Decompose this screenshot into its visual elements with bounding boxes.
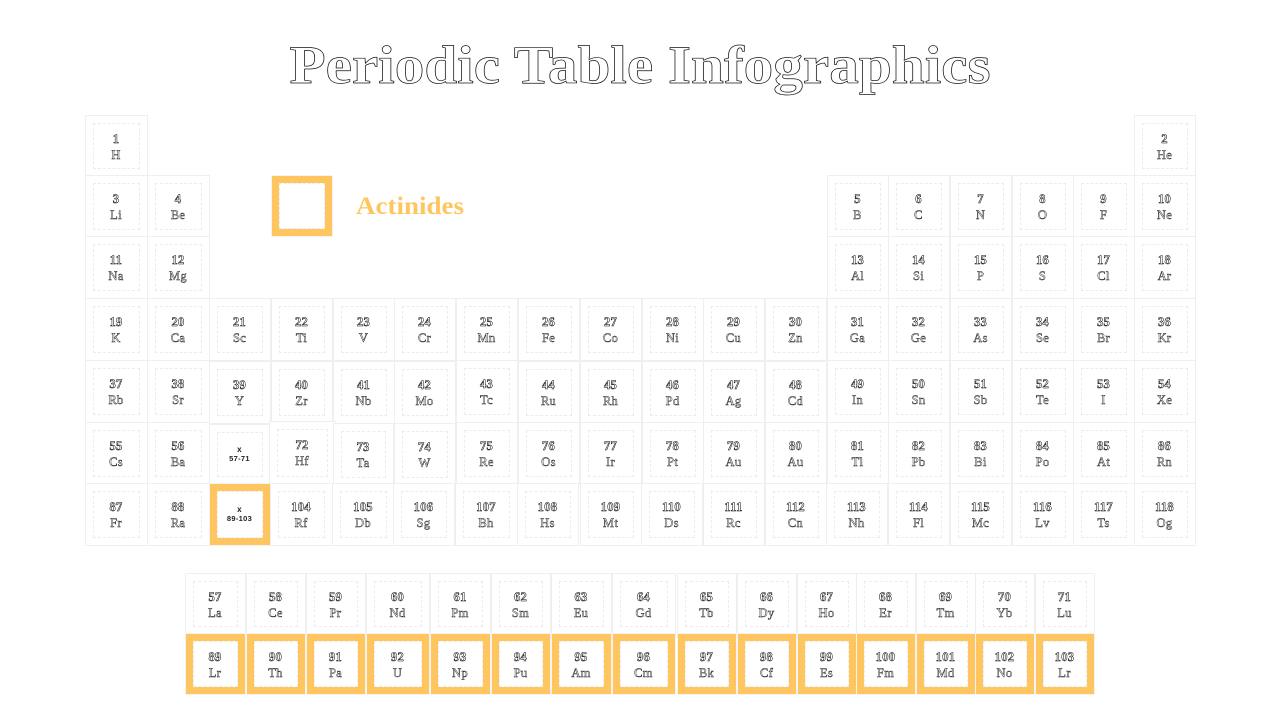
panel: lanthanides row: Tm bbox=[937, 606, 954, 620]
row 6 elements: Au bbox=[726, 455, 741, 469]
row 2 elements: 6 bbox=[915, 192, 922, 206]
panel: actinides row: U bbox=[393, 666, 402, 680]
title: Periodic Table Infographics bbox=[289, 35, 991, 95]
panel: lanthanides row: 65 bbox=[700, 590, 713, 604]
row 6 elements: Ir bbox=[606, 455, 615, 469]
row 6 elements: Os bbox=[541, 455, 556, 469]
row 2 elements: F bbox=[1100, 208, 1107, 222]
row 3 elements: 15 bbox=[974, 253, 987, 267]
row 6 elements: At bbox=[1097, 455, 1110, 469]
row 6 elements: Tl bbox=[852, 455, 863, 469]
row 4 elements: Ge bbox=[911, 331, 926, 345]
row 5 elements: 51 bbox=[974, 377, 987, 391]
row 6 elements: 80 bbox=[789, 439, 802, 453]
row 4 elements: 32 bbox=[912, 315, 925, 329]
panel: actinides row: No bbox=[997, 666, 1012, 680]
row 5 elements: 50 bbox=[912, 377, 925, 391]
row 6 elements: 81 bbox=[851, 439, 864, 453]
row 5 elements: 47 bbox=[727, 378, 740, 392]
row 7 elements: Fr bbox=[110, 516, 122, 530]
row 6 elements: 56 bbox=[171, 439, 185, 453]
panel: actinides row: 94 bbox=[514, 650, 527, 664]
row 7 elements: 88 bbox=[171, 500, 185, 514]
row 7 elements: Rf bbox=[294, 516, 308, 530]
row 7 elements: Og bbox=[1157, 516, 1172, 530]
panel: actinides row: Es bbox=[820, 666, 833, 680]
row 2 elements: B bbox=[853, 208, 862, 222]
row 7 elements: 112 bbox=[786, 500, 805, 514]
row 2 elements: 7 bbox=[977, 192, 984, 206]
row 5 elements: Sr bbox=[172, 393, 184, 407]
row 4 elements: 19 bbox=[109, 315, 123, 329]
row 4 elements: Ga bbox=[850, 331, 865, 345]
row 7 elements: Ds bbox=[664, 516, 679, 530]
row 6 elements: 78 bbox=[666, 439, 679, 453]
row 4 elements: 30 bbox=[789, 315, 802, 329]
row 6 elements: 84 bbox=[1036, 439, 1049, 453]
row 5 elements: Y bbox=[235, 394, 244, 408]
row 5 elements: 52 bbox=[1036, 377, 1049, 391]
row 4 elements: 27 bbox=[604, 315, 617, 329]
panel: lanthanides row: Pm bbox=[451, 606, 469, 620]
panel: lanthanides row: 63 bbox=[574, 590, 588, 604]
panel: lanthanides row: Dy bbox=[759, 606, 774, 620]
row 6 elements: Hf bbox=[295, 454, 309, 468]
panel: actinides row: Pu bbox=[514, 666, 527, 680]
row 4 elements: 35 bbox=[1097, 315, 1110, 329]
panel: actinides row: 92 bbox=[391, 650, 404, 664]
row 6 elements: Cs bbox=[109, 455, 123, 469]
row 7 elements: Ra bbox=[171, 516, 185, 530]
panel: main periodic table bbox=[85, 115, 1196, 546]
row 3 elements: 17 bbox=[1097, 253, 1110, 267]
row 7 elements: x bbox=[237, 505, 242, 514]
row 7 elements: 107 bbox=[476, 500, 496, 514]
row 4 elements: Zn bbox=[788, 331, 803, 345]
row 2 elements: Be bbox=[171, 208, 185, 222]
row 4 elements: Ni bbox=[666, 331, 679, 345]
panel: lanthanides row: Lu bbox=[1057, 606, 1072, 620]
row 2 elements: C bbox=[914, 208, 923, 222]
panel: actinides row: Th bbox=[268, 666, 283, 680]
row 5 elements: 38 bbox=[171, 377, 185, 391]
panel: lanthanides row: Gd bbox=[636, 606, 651, 620]
row 4 elements: 31 bbox=[851, 315, 864, 329]
row 2 elements: Ne bbox=[1157, 208, 1172, 222]
row 3 elements: S bbox=[1039, 269, 1046, 283]
row 7 elements: 111 bbox=[724, 500, 743, 514]
row 6 elements: W bbox=[418, 456, 431, 470]
row 4 elements: Br bbox=[1097, 331, 1110, 345]
row 4 elements: 29 bbox=[727, 315, 740, 329]
row 3 elements: Na bbox=[108, 269, 124, 283]
row 5 elements: I bbox=[1101, 393, 1106, 407]
panel: lanthanides row: Sm bbox=[512, 606, 529, 620]
row 1 elements: He bbox=[1157, 148, 1172, 162]
row 5 elements: 43 bbox=[480, 377, 493, 391]
row 3 elements: Si bbox=[913, 269, 924, 283]
panel: lanthanides row: 64 bbox=[637, 590, 650, 604]
row 6 elements: 73 bbox=[356, 440, 370, 454]
panel: actinides row: 89 bbox=[208, 650, 222, 664]
panel: actinides row: 90 bbox=[269, 650, 282, 664]
row 6 elements: 74 bbox=[418, 440, 431, 454]
row 7 elements: 104 bbox=[291, 500, 311, 514]
row 2 elements: 9 bbox=[1100, 192, 1107, 206]
row 5 elements: 41 bbox=[357, 378, 370, 392]
row 6 elements: 83 bbox=[974, 439, 987, 453]
panel: lanthanides row: 66 bbox=[760, 590, 773, 604]
row 6 elements: 86 bbox=[1158, 439, 1171, 453]
row 4 elements: Cu bbox=[726, 331, 741, 345]
panel: actinides row: Lr bbox=[209, 666, 221, 680]
row 3 elements: Al bbox=[851, 269, 864, 283]
panel: actinides row: Bk bbox=[699, 666, 714, 680]
row 7 elements: 113 bbox=[847, 500, 866, 514]
row 7 elements: Mt bbox=[603, 516, 618, 530]
panel: lanthanides row bbox=[185, 573, 1095, 633]
row 3 elements: 18 bbox=[1158, 253, 1171, 267]
row 7 elements: 116 bbox=[1033, 500, 1052, 514]
panel: lanthanides row: Pr bbox=[330, 606, 341, 620]
row 3 elements: 16 bbox=[1036, 253, 1049, 267]
row 2 elements: 5 bbox=[854, 192, 861, 206]
row 7 elements: Db bbox=[355, 516, 371, 530]
row 7 elements: Lv bbox=[1035, 516, 1050, 530]
row 5 elements: In bbox=[852, 393, 863, 407]
panel: actinides row: 96 bbox=[637, 650, 650, 664]
row 5 elements: 48 bbox=[789, 378, 802, 392]
row 2 elements bbox=[85, 175, 1196, 236]
row 2 elements: 4 bbox=[175, 192, 181, 206]
row 7 elements: Sg bbox=[417, 516, 430, 530]
row 5 elements: Pd bbox=[666, 394, 679, 408]
row 6 elements: x bbox=[237, 445, 242, 454]
panel: actinides row: 103 bbox=[1055, 650, 1074, 664]
row 3 elements: 13 bbox=[851, 253, 864, 267]
row 4 elements: Co bbox=[603, 331, 618, 345]
row 3 elements: Cl bbox=[1097, 269, 1110, 283]
row 2 elements: 3 bbox=[113, 192, 119, 206]
row 5 elements: Ru bbox=[541, 394, 556, 408]
row 7 elements: 105 bbox=[353, 500, 373, 514]
row 7 elements: Bh bbox=[478, 516, 494, 530]
row 6 elements: 75 bbox=[480, 439, 493, 453]
panel: lanthanides row: 68 bbox=[879, 590, 892, 604]
row 5 elements: 46 bbox=[666, 378, 679, 392]
row 5 elements: 39 bbox=[233, 378, 246, 392]
row 5 elements: 53 bbox=[1097, 377, 1110, 391]
panel: lanthanides row: 58 bbox=[269, 590, 282, 604]
row 4 elements: As bbox=[973, 331, 988, 345]
row 5 elements: Cd bbox=[788, 394, 803, 408]
row 5 elements: 54 bbox=[1158, 377, 1171, 391]
row 5 elements: 37 bbox=[109, 377, 123, 391]
panel: lanthanides row: Nd bbox=[390, 606, 405, 620]
panel: lanthanides row: Er bbox=[879, 606, 892, 620]
row 5 elements: Sn bbox=[912, 393, 925, 407]
row 6 elements: 85 bbox=[1097, 439, 1110, 453]
row 4 elements: 36 bbox=[1158, 315, 1171, 329]
row 7 elements: 109 bbox=[601, 500, 620, 514]
row 4 elements: 24 bbox=[418, 315, 431, 329]
panel: actinides row: 101 bbox=[936, 650, 955, 664]
panel: actinides row: 98 bbox=[760, 650, 773, 664]
row 5 elements: 40 bbox=[295, 378, 308, 392]
panel: lanthanides row: 57 bbox=[208, 590, 222, 604]
panel: lanthanides row: Yb bbox=[997, 606, 1012, 620]
row 4 elements: Se bbox=[1036, 331, 1049, 345]
row 1 elements: 2 bbox=[1161, 132, 1168, 146]
row 5 elements: Tc bbox=[480, 393, 493, 407]
row 6 elements: Ta bbox=[357, 456, 369, 470]
row 7 elements: Ts bbox=[1097, 516, 1110, 530]
row 7 elements: 117 bbox=[1094, 500, 1113, 514]
panel: lanthanides row: 67 bbox=[820, 590, 833, 604]
row 2 elements: 8 bbox=[1039, 192, 1046, 206]
row 4 elements: V bbox=[359, 331, 368, 345]
panel: lanthanides row: 62 bbox=[514, 590, 527, 604]
panel: actinides row: Am bbox=[571, 666, 591, 680]
row 7 elements: Mc bbox=[972, 516, 989, 530]
row 5 elements: Zr bbox=[295, 394, 308, 408]
row 4 elements: Sc bbox=[233, 331, 246, 345]
row 4 elements: Kr bbox=[1158, 331, 1171, 345]
row 6 elements: Ba bbox=[171, 455, 185, 469]
panel: lanthanides row: 59 bbox=[329, 590, 342, 604]
row 2 elements: Li bbox=[110, 208, 122, 222]
panel: actinides row bbox=[185, 633, 1095, 695]
panel: lanthanides row: Ce bbox=[268, 606, 283, 620]
row 7 elements: 108 bbox=[538, 500, 557, 514]
row 4 elements: Cr bbox=[418, 331, 431, 345]
row 7 elements: Cn bbox=[788, 516, 803, 530]
row 5 elements: Mo bbox=[416, 394, 433, 408]
row 7 elements bbox=[85, 483, 1196, 546]
panel: lanthanides row: Eu bbox=[574, 606, 588, 620]
row 7 elements: Fl bbox=[913, 516, 924, 530]
legend swatch: actinides bbox=[271, 175, 333, 237]
panel: lanthanides row: La bbox=[208, 606, 222, 620]
row 6 elements: Rn bbox=[1157, 455, 1172, 469]
panel: lanthanides row: 70 bbox=[998, 590, 1011, 604]
row 6 elements: Bi bbox=[974, 455, 987, 469]
row 6 elements: Re bbox=[479, 455, 494, 469]
legend label: actinides: Actinides bbox=[356, 193, 464, 220]
row 6 elements: Pt bbox=[667, 455, 678, 469]
row 7 elements: Rc bbox=[726, 516, 741, 530]
row 5 elements: 49 bbox=[851, 377, 864, 391]
row 5 elements: Sb bbox=[974, 393, 987, 407]
row 5 elements: Rh bbox=[603, 394, 618, 408]
panel: actinides row: Np bbox=[452, 666, 468, 680]
row 7 elements: 114 bbox=[909, 500, 928, 514]
row 5 elements: 45 bbox=[604, 378, 617, 392]
row 7 elements: 87 bbox=[109, 500, 123, 514]
row 7 elements: 118 bbox=[1155, 500, 1174, 514]
panel: lanthanides row: 69 bbox=[939, 590, 952, 604]
panel: lanthanides row: Tb bbox=[699, 606, 714, 620]
panel: lanthanides row: 60 bbox=[391, 590, 404, 604]
row 3 elements: Mg bbox=[169, 269, 187, 283]
row 4 elements: Mn bbox=[478, 331, 495, 345]
panel: actinides row: 95 bbox=[574, 650, 588, 664]
row 1 elements: H bbox=[111, 148, 121, 162]
panel: actinides row: Fm bbox=[877, 666, 894, 680]
row 6 elements: Pb bbox=[912, 455, 925, 469]
row 4 elements: 28 bbox=[666, 315, 679, 329]
row 1 elements bbox=[85, 115, 1196, 175]
row 4 elements: K bbox=[111, 331, 121, 345]
panel: actinides row: 99 bbox=[820, 650, 833, 664]
panel: actinides row: 97 bbox=[700, 650, 713, 664]
row 3 elements bbox=[85, 236, 1196, 298]
row 5 elements: 42 bbox=[418, 378, 431, 392]
row 1 elements: 1 bbox=[113, 132, 119, 146]
row 5 elements: Nb bbox=[356, 394, 371, 408]
row 5 elements bbox=[85, 361, 1196, 424]
panel: lanthanides row: Ho bbox=[819, 606, 834, 620]
panel: actinides row: Lr bbox=[1058, 666, 1071, 680]
row 5 elements: Te bbox=[1036, 393, 1049, 407]
row 7 elements: 115 bbox=[971, 500, 990, 514]
row 6 elements: 57-71 bbox=[229, 454, 250, 463]
row 7 elements: 110 bbox=[662, 500, 681, 514]
row 3 elements: 12 bbox=[171, 253, 185, 267]
row 2 elements: O bbox=[1038, 208, 1047, 222]
row 7 elements: Hs bbox=[540, 516, 555, 530]
row 4 elements: Ca bbox=[171, 331, 185, 345]
row 4 elements: 26 bbox=[542, 315, 555, 329]
row 4 elements: 23 bbox=[357, 315, 370, 329]
panel: actinides row: Pa bbox=[329, 666, 342, 680]
row 6 elements bbox=[85, 421, 1196, 485]
row 4 elements: 22 bbox=[295, 315, 308, 329]
row 4 elements: 33 bbox=[974, 315, 987, 329]
row 6 elements: 77 bbox=[604, 439, 617, 453]
row 6 elements: 76 bbox=[542, 439, 555, 453]
row 6 elements: Au bbox=[788, 455, 803, 469]
row 4 elements: Ti bbox=[296, 331, 307, 345]
row 4 elements: Fe bbox=[542, 331, 555, 345]
panel: lanthanides row: 61 bbox=[453, 590, 467, 604]
row 6 elements: 55 bbox=[109, 439, 123, 453]
row 4 elements: 25 bbox=[480, 315, 493, 329]
row 6 elements: 82 bbox=[912, 439, 925, 453]
row 5 elements: Xe bbox=[1157, 393, 1172, 407]
panel: actinides row: 100 bbox=[876, 650, 895, 664]
row 3 elements: 14 bbox=[912, 253, 925, 267]
row 7 elements: 89-103 bbox=[227, 514, 252, 523]
row 3 elements: Ar bbox=[1158, 269, 1171, 283]
panel: actinides row: Md bbox=[937, 666, 954, 680]
row 7 elements: 106 bbox=[414, 500, 433, 514]
row 2 elements: 10 bbox=[1158, 192, 1171, 206]
row 2 elements: N bbox=[976, 208, 985, 222]
panel: actinides row: 93 bbox=[453, 650, 467, 664]
row 4 elements bbox=[85, 298, 1196, 361]
row 5 elements: Rb bbox=[108, 393, 124, 407]
panel: actinides row: Cm bbox=[634, 666, 653, 680]
row 6 elements: 72 bbox=[295, 438, 309, 452]
row 5 elements: 44 bbox=[542, 378, 555, 392]
row 4 elements: 34 bbox=[1036, 315, 1049, 329]
row 3 elements: P bbox=[977, 269, 984, 283]
row 4 elements: 21 bbox=[233, 315, 246, 329]
row 7 elements: Nh bbox=[849, 516, 864, 530]
panel: actinides row: 91 bbox=[329, 650, 342, 664]
row 4 elements: 20 bbox=[171, 315, 185, 329]
row 3 elements: 11 bbox=[110, 253, 122, 267]
row 5 elements: Ag bbox=[726, 394, 741, 408]
row 6 elements: 79 bbox=[727, 439, 740, 453]
panel: actinides row: Cf bbox=[760, 666, 773, 680]
panel: actinides row: 102 bbox=[995, 650, 1014, 664]
panel: lanthanides row: 71 bbox=[1058, 590, 1071, 604]
row 6 elements: Po bbox=[1036, 455, 1049, 469]
